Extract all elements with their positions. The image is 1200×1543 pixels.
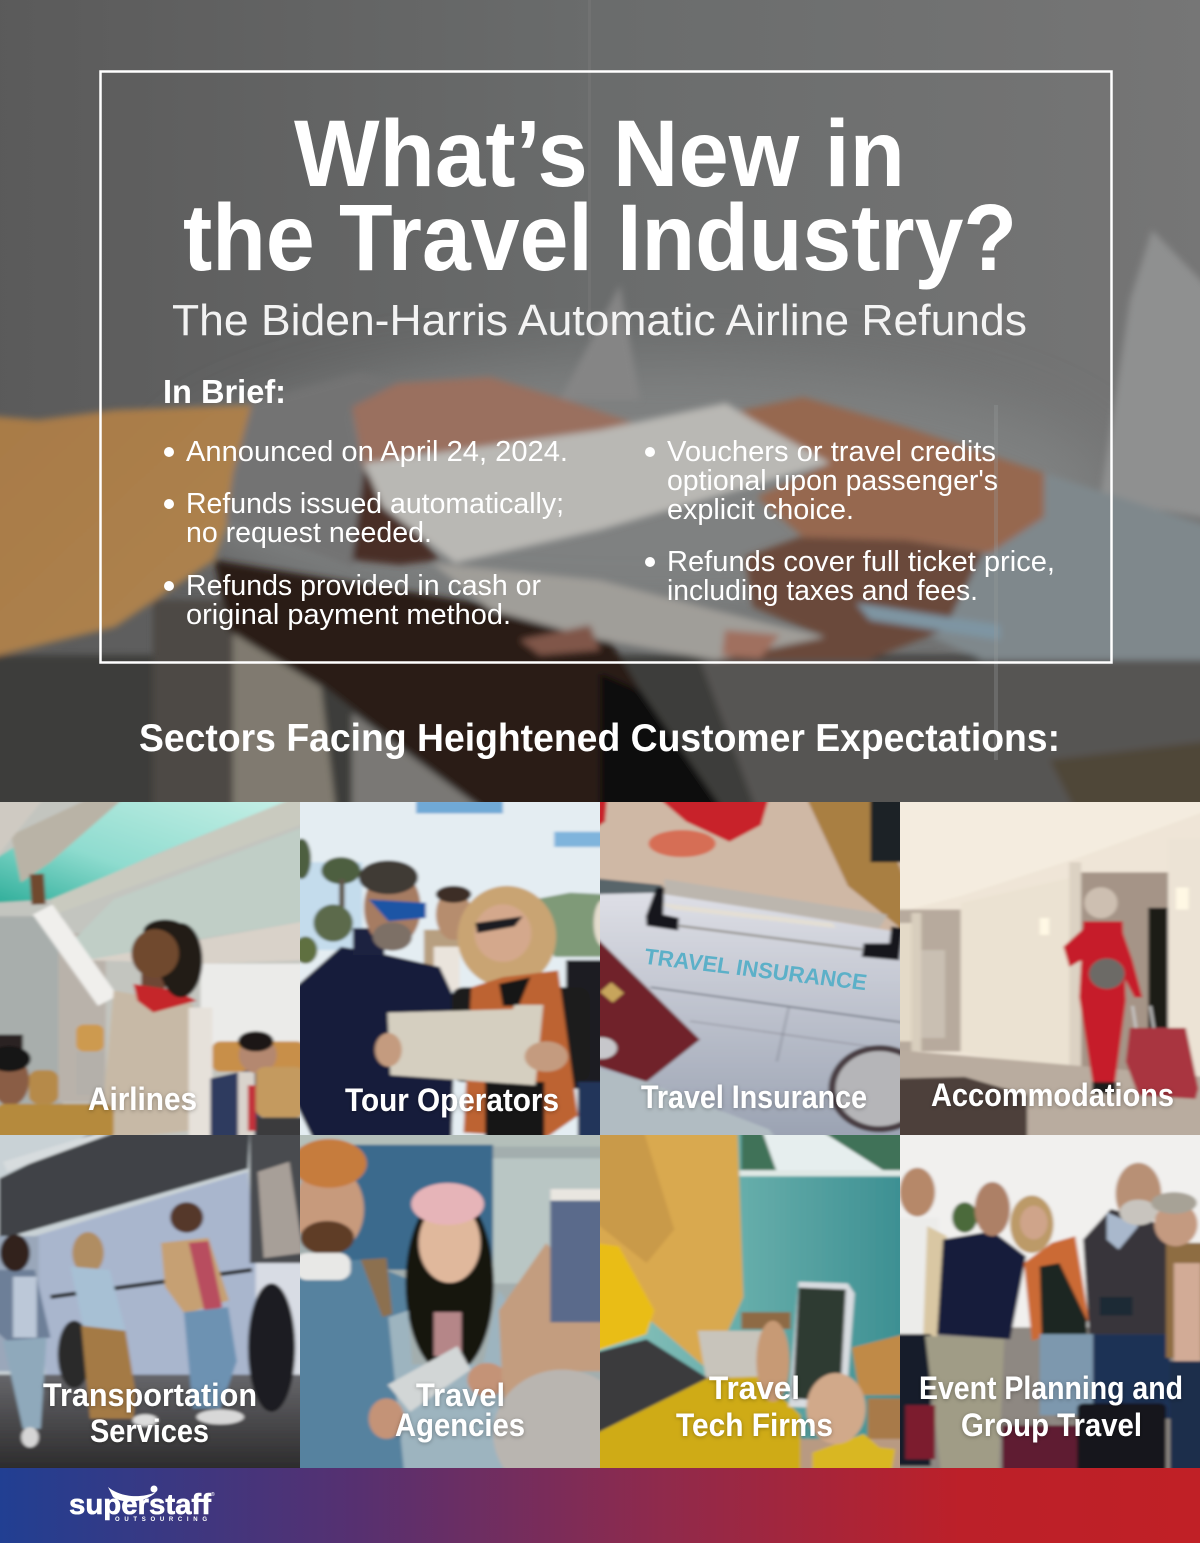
tile: travel tech firms [595,1128,905,1473]
left bullet list [164,436,568,631]
photo: couple with map [300,802,600,1135]
label: travel insurance: Travel Insurance [641,1079,867,1115]
right bullet list: explicit choice. [667,494,854,526]
title: What’s New in [294,101,905,207]
label: transportation services: Services [90,1413,209,1449]
title frame panel [100,72,1112,662]
background photo: ticket handover [0,0,1200,825]
right bullet list: optional upon passenger's [667,465,998,497]
footer bar [0,1468,1200,1543]
tile: accommodations [895,798,1200,1139]
tile: travel agencies [292,1128,631,1498]
logo: superstaff outsourcing: OUTSOURCING [115,1517,207,1523]
photo: phone at lake [600,1135,900,1468]
photo: flight attendant [0,802,300,1135]
label: travel tech firms: Travel [709,1370,800,1406]
logo: superstaff outsourcing: superstaff [69,1489,211,1521]
left bullet list: no request needed. [186,517,432,549]
section heading: sectors: Sectors Facing Heightened Customer Expectations: [139,717,1060,760]
title: the Travel Industry? [183,185,1017,291]
label: event planning and group travel [919,1370,1183,1443]
label: event planning and group travel: Group Travel [961,1407,1142,1443]
right bullet list: Vouchers or travel credits [667,436,996,468]
tile: tour operators [292,798,613,1139]
right bullet list: Refunds cover full ticket price, [667,546,1055,578]
label: travel agencies: Travel [416,1377,505,1413]
label: travel tech firms: Tech Firms [676,1407,833,1443]
tile: transportation services [0,1128,305,1473]
label: tour operators: Tour Operators [345,1082,559,1118]
left bullet list: Announced on April 24, 2024. [186,436,568,468]
label: transportation services [43,1377,257,1449]
photo: travellers by coach [0,1135,300,1468]
photo: insurance form clipboard [600,802,900,1135]
label: travel tech firms [676,1370,833,1443]
right bullet list: including taxes and fees. [667,575,978,607]
photo: tour group [900,1135,1200,1468]
logo: superstaff outsourcing: ® [211,1491,215,1498]
printed form text: TRAVEL INSURANCE [643,944,869,996]
heading: in brief: In Brief: [163,373,286,410]
subtitle: The Biden-Harris Automatic Airline Refunds [172,296,1027,345]
label: travel agencies: Agencies [395,1407,525,1443]
title [183,101,1017,291]
label: accommodations: Accommodations [931,1077,1174,1113]
tile: event planning and group travel [895,1128,1200,1473]
label: travel agencies [395,1377,525,1443]
right bullet list [645,436,1055,607]
left bullet list: Refunds provided in cash or [186,570,541,602]
left bullet list: Refunds issued automatically; [186,488,564,520]
label: transportation services: Transportation [43,1377,257,1413]
left bullet list: original payment method. [186,599,511,631]
label: airlines: Airlines [88,1081,197,1117]
tile: travel insurance [585,798,927,1139]
tile: airlines [0,798,305,1141]
photo: hotel corridor [900,802,1200,1135]
photo: couple with ticket [300,1135,600,1468]
